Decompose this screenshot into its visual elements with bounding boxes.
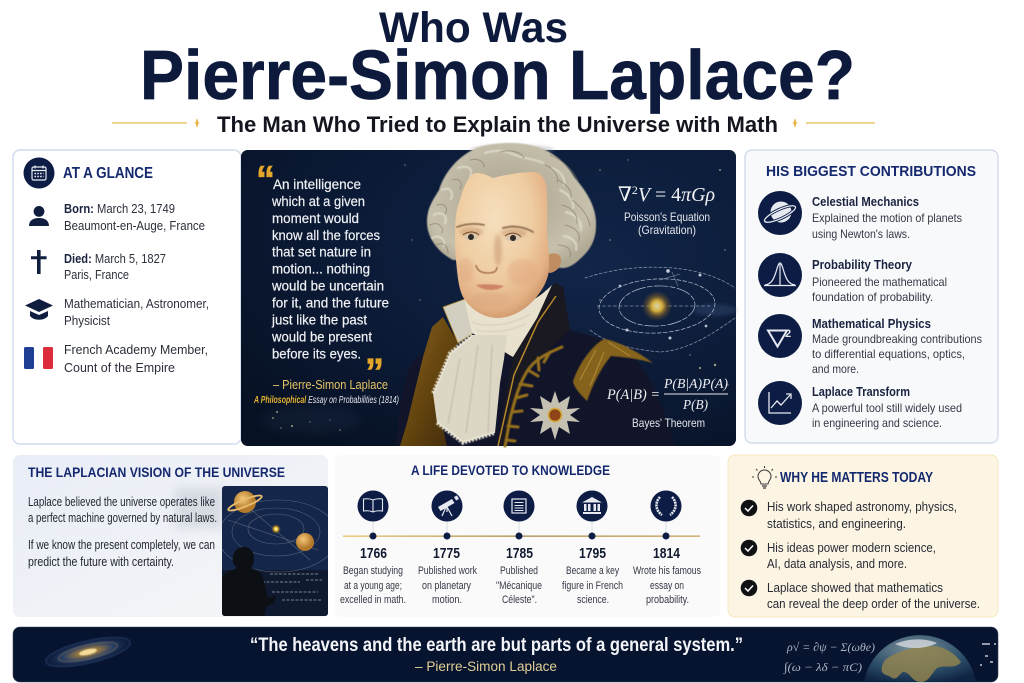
decoration: equations <box>783 640 875 674</box>
brows <box>457 224 533 232</box>
event: 1795: 1795 <box>579 546 606 562</box>
quote text: motion... nothing <box>272 260 370 276</box>
check item two <box>741 540 936 571</box>
event: 1766 <box>340 490 406 606</box>
item: mathematical physics: and more. <box>812 362 859 376</box>
heading: vision: THE LAPLACIAN VISION OF THE UNIVERSE <box>28 464 285 480</box>
quote text <box>271 176 389 362</box>
portrait: hair <box>427 143 596 268</box>
item: probability theory: foundation of probability. <box>812 290 933 304</box>
label: gravitation: (Gravitation) <box>638 223 696 237</box>
item: laplace transform: A powerful tool still widely used <box>812 401 962 415</box>
subtitle ornaments <box>112 118 875 128</box>
mouth <box>476 284 504 290</box>
quote mark open: “ <box>256 159 275 201</box>
event: 1785: 1785 <box>506 546 533 562</box>
vision text: a perfect machine governed by natural laws. <box>28 511 217 525</box>
birthplace: Beaumont-en-Auge, France <box>64 218 205 233</box>
portrait: lace jabot <box>433 335 507 443</box>
quote text: would be uncertain <box>271 278 384 294</box>
item: mathematical physics: Mathematical Physics <box>812 316 931 331</box>
event: 1795 <box>562 490 623 606</box>
label: bayes' theorem: Bayes' Theorem <box>632 416 705 430</box>
icon: del squared: 2 <box>785 328 791 340</box>
title line: Pierre-Simon Laplace?: Pierre-Simon Laplace? <box>140 36 855 114</box>
item: laplace transform: in engineering and science. <box>812 416 942 430</box>
check item two: His ideas power modern science, <box>767 541 936 555</box>
icon: book <box>358 490 388 522</box>
item: laplace transform <box>758 381 962 430</box>
event: 1785: Céleste". <box>502 594 537 606</box>
quote text: know all the forces <box>272 227 380 243</box>
illustration: galaxy <box>34 627 142 677</box>
panel: at a glance <box>13 150 241 444</box>
quote text: before its eyes. <box>272 346 361 362</box>
icon: french flag <box>24 347 53 369</box>
occupation line two: Physicist <box>64 313 110 328</box>
occupation line one: Mathematician, Astronomer, <box>64 296 209 311</box>
event: 1775: motion. <box>432 594 462 606</box>
icon: laurel wreath <box>650 490 682 522</box>
item: celestial mechanics <box>758 191 962 241</box>
event: 1775: on planetary <box>422 580 471 592</box>
quote attribution: – Pierre-Simon Laplace <box>273 377 388 392</box>
panel: his biggest contributions <box>745 150 998 443</box>
born: Born: March 23, 1749 <box>64 201 175 216</box>
portrait: gold lapel edge <box>498 296 556 446</box>
equation: poisson: 2 <box>632 183 638 197</box>
item: probability theory: Probability Theory <box>812 257 913 272</box>
icon: document <box>504 490 534 522</box>
event: 1766: excelled in math. <box>340 594 406 606</box>
portrait: face <box>455 172 549 318</box>
portrait: epaulette <box>573 339 653 401</box>
equation: poisson: V <box>638 184 653 206</box>
event: 1785: Published <box>500 565 538 577</box>
label: poisson's equation: Poisson's Equation <box>624 210 710 224</box>
portrait: ear <box>548 253 561 273</box>
quote: “The heavens and the earth are but parts of a general system.” <box>250 635 743 656</box>
vision text <box>28 495 217 569</box>
icon: del squared <box>758 314 802 358</box>
event: 1814: Wrote his famous <box>633 565 701 577</box>
event: 1775 <box>418 490 477 606</box>
event: 1766: 1766 <box>360 546 387 562</box>
died: Died: March 5, 1827 <box>64 251 166 266</box>
event: 1795: science. <box>577 594 609 606</box>
cheek and nose shading <box>458 227 537 308</box>
icon: telescope <box>432 490 462 522</box>
event: 1766: at a young age; <box>344 580 402 592</box>
panel: why he matters today <box>728 455 998 617</box>
banner: closing quote <box>13 627 998 682</box>
event: 1785: "Mécanique <box>496 580 542 592</box>
icon: person <box>29 206 49 226</box>
illustration: silhouette and planets <box>222 486 328 616</box>
event: 1814 <box>633 490 701 606</box>
item: probability theory: Pioneered the mathematical <box>812 275 947 289</box>
event: 1766: Began studying <box>343 565 403 577</box>
quote text: which at a given <box>271 193 365 209</box>
check item one <box>741 500 957 531</box>
hair shadow over the panel top <box>470 145 554 155</box>
quote text: for it, and the future <box>272 294 389 310</box>
icon: bell curve <box>758 253 802 297</box>
heading: a life devoted to knowledge: A LIFE DEVOTED TO KNOWLEDGE <box>411 462 610 478</box>
event: 1814: 1814 <box>653 546 680 562</box>
subtitle: The Man Who Tried to Explain the Universe with Math <box>217 112 778 137</box>
portrait: collar right dark <box>497 283 570 446</box>
icon: planet <box>758 191 802 235</box>
membership line one: French Academy Member, <box>64 342 208 357</box>
item: celestial mechanics: using Newton's laws. <box>812 227 910 241</box>
eyes <box>464 234 478 240</box>
membership line two: Count of the Empire <box>64 360 175 375</box>
vision text: Laplace believed the universe operates like <box>28 495 215 509</box>
illustration: earth <box>864 635 996 682</box>
heading: at a glance: AT A GLANCE <box>63 165 153 182</box>
event: 1814: probability. <box>646 594 689 606</box>
equation: bayes theorem: P(B) <box>682 397 708 412</box>
icon: graduation cap <box>25 299 53 320</box>
check item three: can reveal the deep order of the universe. <box>767 597 980 611</box>
vision text: predict the future with certainty. <box>28 555 174 569</box>
title block <box>112 4 875 137</box>
item: mathematical physics: Made groundbreaking contributions <box>812 332 982 346</box>
title line: Who Was: Who Was <box>379 4 568 52</box>
panel: timeline <box>335 455 720 617</box>
equation: bayes theorem: P(B|A)P(A) <box>663 376 729 391</box>
portrait: lapel left gold <box>400 317 458 446</box>
icon: calendar <box>24 158 54 188</box>
equation: poisson: = 4πGρ <box>655 184 715 206</box>
item: celestial mechanics: Celestial Mechanics <box>812 194 919 209</box>
item: probability theory <box>758 253 947 304</box>
panel: laplacian vision <box>13 455 338 617</box>
icon: cross <box>31 250 47 274</box>
equation: bayes theorem: P(A|B) = <box>606 387 660 403</box>
item: mathematical physics <box>758 314 982 376</box>
item: mathematical physics: to differential equations, optics, <box>812 347 965 361</box>
check item two: AI, data analysis, and more. <box>767 557 907 571</box>
event: 1814: essay on <box>650 580 684 592</box>
panel: hero portrait and quote <box>241 143 737 446</box>
event: 1775: 1775 <box>433 546 460 562</box>
death place: Paris, France <box>64 267 129 282</box>
vision text: If we know the present completely, we can <box>28 538 215 552</box>
portrait: medal <box>530 391 580 440</box>
portrait: gold embroidery <box>505 347 562 446</box>
portrait: collar white <box>443 299 473 343</box>
event: 1795: Became a key <box>566 565 619 577</box>
check item three <box>741 580 980 611</box>
portrait: cravat stock <box>464 285 552 357</box>
quote text: An intelligence <box>273 176 361 192</box>
timeline axis <box>343 536 700 537</box>
quote mark close: ” <box>365 352 384 394</box>
item: celestial mechanics: Explained the motion of planets <box>812 211 962 225</box>
heading: why he matters today: WHY HE MATTERS TODAY <box>780 470 933 486</box>
nose <box>476 265 497 273</box>
illustration: solar system diagram <box>585 267 735 352</box>
quote text: that set nature in <box>272 244 371 260</box>
quote author: – Pierre-Simon Laplace <box>415 659 557 674</box>
starfield <box>272 159 729 431</box>
event: 1775: Published work <box>418 565 477 577</box>
quote text: moment would <box>272 210 359 226</box>
icon: light bulb <box>752 466 777 488</box>
check item three: Laplace showed that mathematics <box>767 581 943 595</box>
heading: contributions: HIS BIGGEST CONTRIBUTIONS <box>766 163 976 180</box>
quote text: would be present <box>271 328 372 344</box>
check item one: statistics, and engineering. <box>767 517 906 531</box>
decoration: equations: ρ√ = ∂ψ − Σ(ωθe) <box>786 640 875 654</box>
decoration: equations: ∫(ω − λδ − πC) <box>783 660 862 674</box>
quote text: just like the past <box>271 312 367 328</box>
check item one: His work shaped astronomy, physics, <box>767 500 957 514</box>
event: 1785 <box>496 490 542 606</box>
item: laplace transform: Laplace Transform <box>812 384 910 399</box>
equation: bayes theorem <box>606 376 729 412</box>
event: 1795: figure in French <box>562 580 623 592</box>
icon: chart <box>758 381 802 425</box>
icon: academy building <box>576 490 608 522</box>
equation: poisson: ∇ <box>618 184 632 206</box>
quote source: A Philosophical Essay on Probabilities (1814) <box>253 395 399 406</box>
portrait: coat <box>396 287 675 446</box>
